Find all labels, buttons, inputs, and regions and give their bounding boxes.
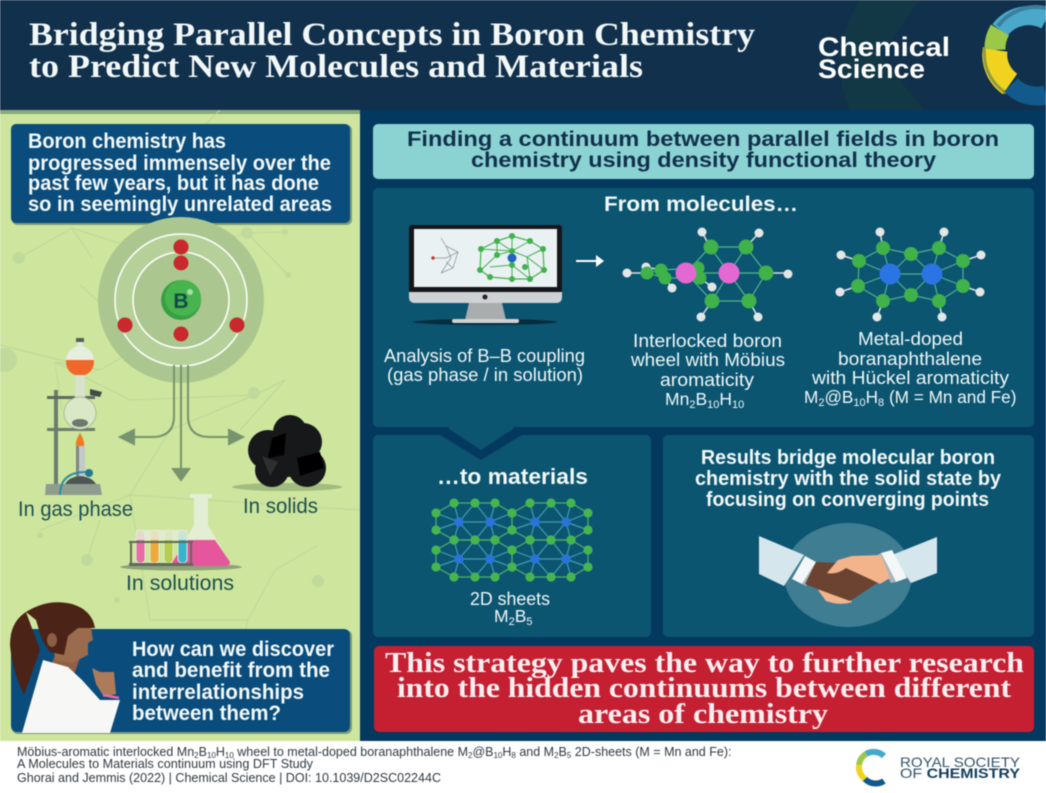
caption: Mobius aromaticity: 10 [707, 399, 719, 411]
label: in solutions: In solutions [126, 572, 234, 595]
chevron linking panels [440, 427, 522, 460]
icon: journal ring logo [984, 7, 1046, 96]
callout: boron chemistry intro: past few years, but it has done [28, 172, 319, 195]
panel: from molecules [373, 188, 1034, 427]
footer band [0, 741, 1046, 793]
caption: 2D sheets [470, 589, 550, 628]
caption: Huckel aromaticity: 10 [853, 397, 866, 409]
caption: Mobius aromaticity: H [719, 389, 732, 409]
caption: 2D sheets: 2 [509, 616, 515, 628]
caption: B-B coupling analysis: (gas phase / in solution) [387, 365, 583, 385]
heading: from molecules: From molecules… [604, 193, 798, 216]
caption: Huckel aromaticity: 2 [818, 397, 824, 409]
caption: Mobius aromaticity [630, 331, 785, 411]
journal name: Chemical Science: Science [818, 54, 925, 84]
caption: Huckel aromaticity: @B [824, 387, 853, 407]
callout: boron chemistry intro: progressed immensely over the [28, 152, 331, 175]
text: results bridge: chemistry with the solid state by [695, 468, 1002, 490]
text: results bridge [695, 447, 1002, 511]
citation text: @B [472, 745, 493, 759]
callout: question: between them? [132, 702, 281, 725]
RSC wordmark: ROYAL SOCIETY [900, 754, 1021, 770]
caption: Mobius aromaticity: Interlocked boron [633, 331, 782, 351]
title: to Predict New Molecules and Materials [29, 49, 643, 85]
icon: handshake [759, 523, 937, 627]
heading: continuum banner: chemistry using density functional theory [471, 149, 936, 172]
title [29, 17, 756, 85]
caption: B-B coupling analysis [384, 346, 585, 385]
title: Bridging Parallel Concepts in Boron Chemistry [29, 17, 756, 53]
icon: RSC ring logo [859, 752, 884, 783]
diagram: 2D sheet lattice [431, 498, 593, 582]
citation text: 10 [207, 751, 216, 760]
citation text: 10 [493, 751, 503, 760]
icon: boron atom: B [173, 290, 189, 313]
callout: question [11, 629, 352, 734]
citation text: B [559, 745, 567, 759]
text: results bridge: focusing on converging points [706, 489, 989, 511]
icon: gas phase apparatus [45, 338, 102, 495]
arrow: to molecules [576, 255, 604, 267]
caption: Huckel aromaticity [804, 329, 1016, 409]
citation text: 2 [194, 751, 199, 760]
icon: boron atom [98, 217, 264, 383]
caption: Mobius aromaticity: 10 [732, 399, 744, 411]
citation text: H [502, 745, 511, 759]
citation text: and M [516, 745, 554, 759]
molecule: boranaphthalene [836, 228, 986, 322]
citation text: H [216, 745, 225, 759]
caption: B-B coupling analysis: Analysis of B–B coupling [384, 346, 585, 366]
header band [0, 0, 1046, 111]
citation text: 5 [567, 751, 572, 760]
citation text: A Molecules to Materials continuum using DFT Study [17, 757, 314, 771]
citation text: 2D-sheets (M = Mn and Fe): [571, 745, 731, 759]
RSC wordmark [900, 754, 1021, 781]
icon: solid coal lump [232, 415, 342, 491]
caption: Mobius aromaticity: Mn [665, 389, 689, 409]
callout: question: How can we discover [132, 638, 334, 661]
citation text [17, 745, 731, 785]
callout: boron chemistry intro [11, 124, 352, 225]
caption: Huckel aromaticity: (M = Mn and Fe) [884, 387, 1016, 407]
caption: 2D sheets: M [494, 606, 509, 626]
panel: results [663, 435, 1034, 637]
citation text: 2 [468, 751, 473, 760]
citation text: Ghorai and Jemmis (2022) | Chemical Science | DOI: 10.1039/D2SC02244C [17, 771, 441, 785]
callout: question: and benefit from the [132, 659, 330, 682]
icon: solutions glassware [120, 494, 242, 570]
RSC wordmark: OF CHEMISTRY [900, 765, 1021, 781]
citation text: wheel to metal-doped boranaphthalene M [234, 745, 468, 759]
icon: computer monitor with molecule [409, 225, 562, 325]
caption: Huckel aromaticity: with Hückel aromaticity [811, 368, 1009, 388]
journal name: Chemical Science: Chemical [818, 32, 950, 62]
caption: Huckel aromaticity: Metal-doped [858, 329, 963, 349]
citation text: Möbius-aromatic interlocked Mn [17, 745, 194, 759]
text: results bridge: Results bridge molecular boron [701, 447, 995, 469]
callout: strategy: This strategy paves the way to further research [385, 647, 1024, 679]
callout: strategy: into the hidden continuums between different [397, 672, 1011, 704]
label: in solids: In solids [243, 495, 318, 518]
journal name: Chemical Science [818, 32, 950, 84]
caption: Mobius aromaticity: B [695, 389, 707, 409]
callout: strategy [374, 646, 1034, 732]
caption: Huckel aromaticity: boranaphthalene [838, 349, 982, 369]
panel: left background [0, 110, 360, 741]
heading: continuum banner: Finding a continuum between parallel fields in boron [407, 128, 999, 151]
label: in gas phase: In gas phase [18, 498, 133, 521]
heading: to materials: …to materials [437, 464, 588, 489]
caption: Mobius aromaticity: aromaticity [660, 370, 754, 390]
citation text: 8 [511, 751, 516, 760]
caption: 2D sheets: 2D sheets [470, 589, 550, 609]
caption: Mobius aromaticity: 2 [689, 399, 695, 411]
arrows: three branches from atom [120, 365, 243, 480]
caption: Huckel aromaticity: M [804, 387, 818, 407]
callout: boron chemistry intro: Boron chemistry has [28, 130, 226, 153]
caption: 2D sheets: 5 [526, 616, 533, 628]
callout: strategy: areas of chemistry [578, 698, 829, 730]
caption: 2D sheets: B [515, 606, 526, 626]
caption: Mobius aromaticity: wheel with Möbius [630, 350, 785, 370]
heading: continuum banner [373, 124, 1034, 179]
citation text: B [199, 745, 207, 759]
citation text: 2 [554, 751, 559, 760]
caption: Huckel aromaticity: 8 [878, 397, 884, 409]
citation text: 10 [225, 751, 234, 760]
caption: Huckel aromaticity: H [866, 387, 878, 407]
callout: boron chemistry intro: so in seemingly unrelated areas [28, 193, 332, 216]
callout: question: interrelationships [132, 681, 304, 704]
icon: woman scientist [10, 602, 120, 733]
panel: to materials [373, 427, 651, 637]
molecule: Mobius wheel [622, 228, 792, 322]
